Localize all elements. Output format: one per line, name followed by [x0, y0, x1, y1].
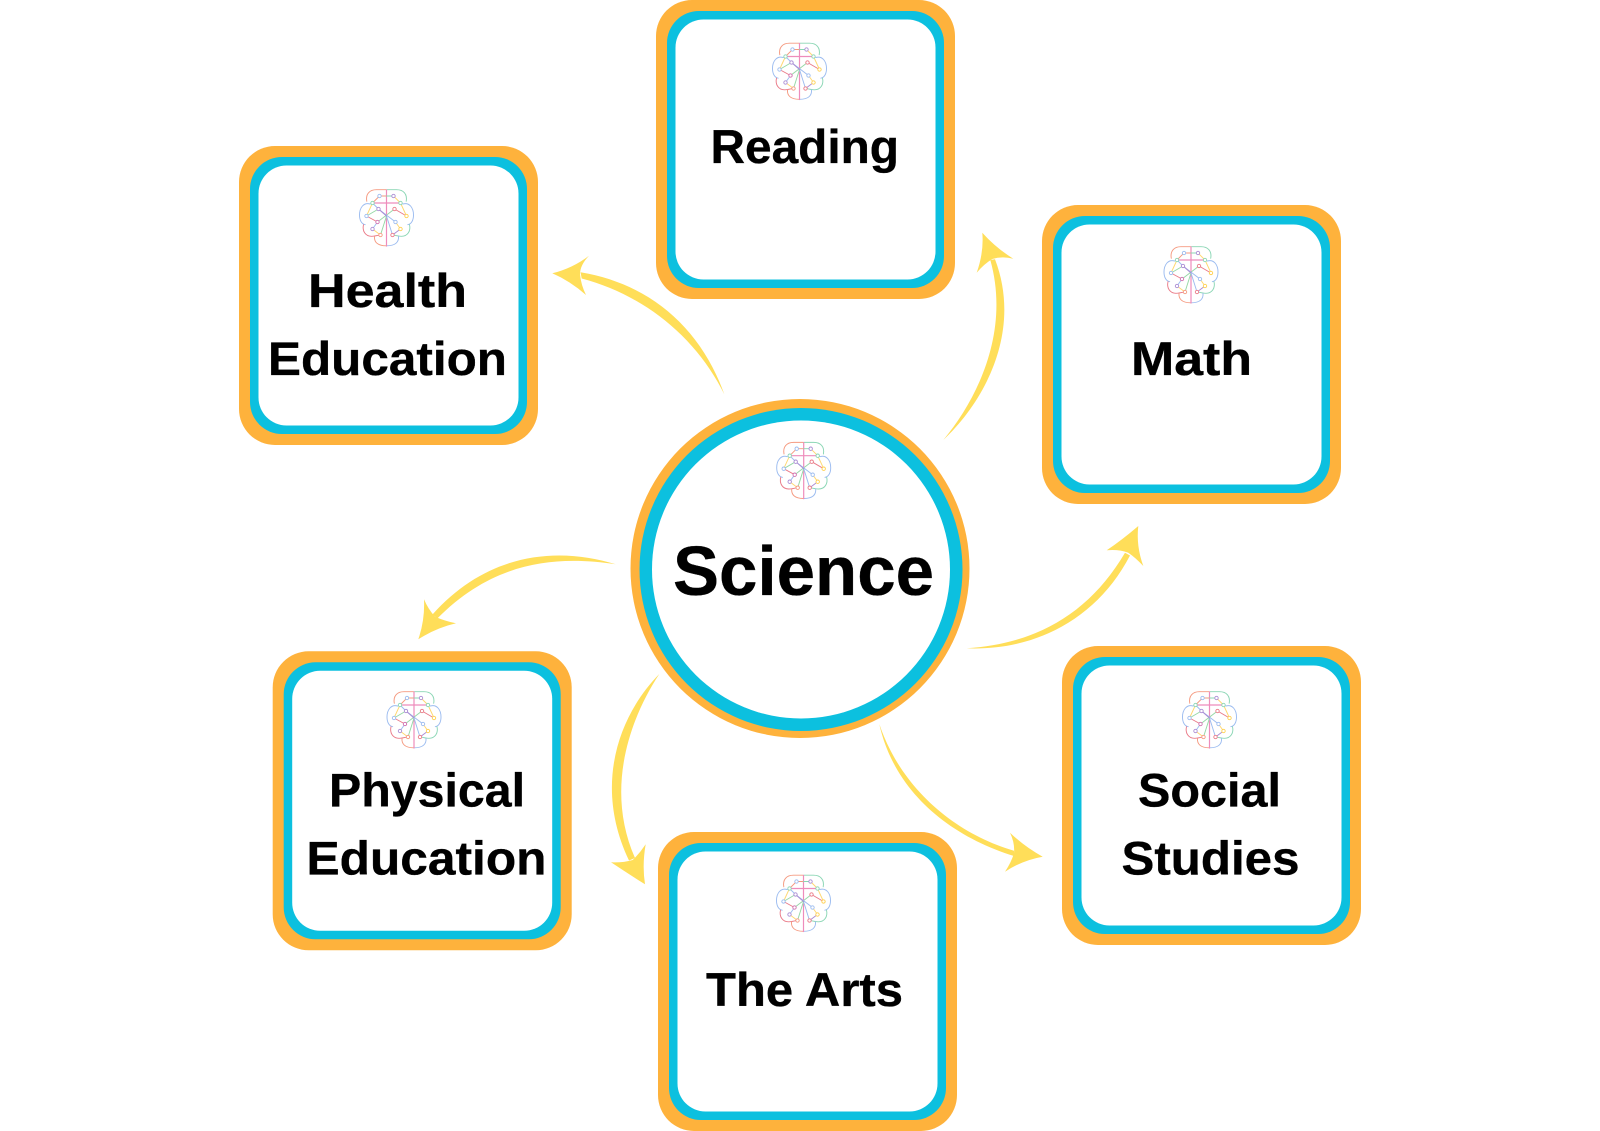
- card frame: [239, 146, 538, 445]
- arrow: Science to Reading: [943, 233, 1013, 440]
- card frame: [658, 832, 957, 1131]
- icon: brain: [387, 692, 441, 748]
- label: Math: [1131, 332, 1252, 385]
- panel: Reading: [656, 0, 955, 299]
- icon: brain: [1164, 247, 1218, 303]
- icon: brain: [777, 442, 831, 499]
- title: Science: [673, 532, 934, 610]
- arrow: Science to Physical Education: [418, 555, 616, 639]
- card frame: [1042, 205, 1341, 504]
- label: Health: [308, 264, 467, 317]
- panel: Social Studies: [1062, 646, 1361, 945]
- label: Physical: [329, 764, 525, 816]
- label: Studies: [1122, 832, 1300, 884]
- icon: brain: [1182, 692, 1236, 748]
- label: The Arts: [706, 963, 903, 1016]
- icon: brain: [772, 43, 826, 100]
- panel: Physical Education: [273, 651, 572, 950]
- card frame: [1062, 646, 1361, 945]
- label: Social: [1138, 764, 1281, 816]
- panel: Health Education: [239, 146, 538, 445]
- card frame: [273, 651, 572, 950]
- label: Education: [268, 332, 507, 385]
- hub ring: [630, 399, 970, 738]
- label: Education: [306, 832, 546, 884]
- card frame: [656, 0, 955, 299]
- panel: Science hub: [630, 399, 970, 738]
- panel: Math: [1042, 205, 1341, 504]
- arrow: Science to Math: [967, 526, 1143, 648]
- arrow: Science to Health Education: [552, 256, 724, 394]
- arrow: Science to Social Studies: [879, 724, 1043, 872]
- panel: The Arts: [658, 832, 957, 1131]
- icon: brain: [776, 875, 830, 932]
- arrow: Science to The Arts: [611, 674, 659, 884]
- icon: brain: [360, 190, 414, 246]
- label: Reading: [710, 120, 899, 173]
